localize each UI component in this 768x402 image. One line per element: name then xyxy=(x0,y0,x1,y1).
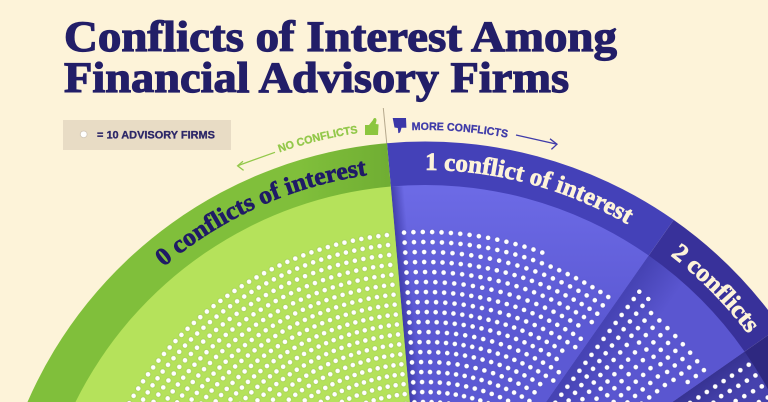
icon: thumbs down xyxy=(393,118,406,133)
legend: 10 advisory firms: = 10 ADVISORY FIRMS xyxy=(97,129,215,141)
dots: 2 conflicts xyxy=(550,299,713,402)
label: 0 conflicts of interest: 0 conflicts of interest xyxy=(156,161,368,264)
dots: 3 conflicts xyxy=(681,365,768,402)
panel: 3+ conflicts sector xyxy=(672,335,768,402)
panel: 1 conflict sector xyxy=(387,142,674,402)
arrow: toward no conflicts xyxy=(238,152,275,170)
panel: 0 conflicts sector xyxy=(28,143,410,402)
dots: 1 conflict xyxy=(404,220,616,402)
title: Conflicts of Interest Among xyxy=(64,14,618,61)
dots: 2 conflicts apex xyxy=(637,289,651,301)
label: 2 conflicts: 2 conflicts xyxy=(670,243,757,332)
legend: 10 advisory firms xyxy=(63,120,231,150)
label: 1 conflict of interest: 1 conflict of interest xyxy=(426,153,634,224)
dots: 0 conflicts xyxy=(79,235,417,402)
icon: thumbs up xyxy=(365,118,379,135)
panel: 2 conflicts sector xyxy=(546,220,768,402)
direction label: no conflicts: NO CONFLICTS xyxy=(278,126,358,152)
title xyxy=(64,14,618,102)
title: Financial Advisory Firms xyxy=(64,55,569,102)
divider tick xyxy=(383,108,387,144)
direction label: more conflicts: MORE CONFLICTS xyxy=(412,122,508,138)
arrow: toward more conflicts xyxy=(516,135,557,149)
